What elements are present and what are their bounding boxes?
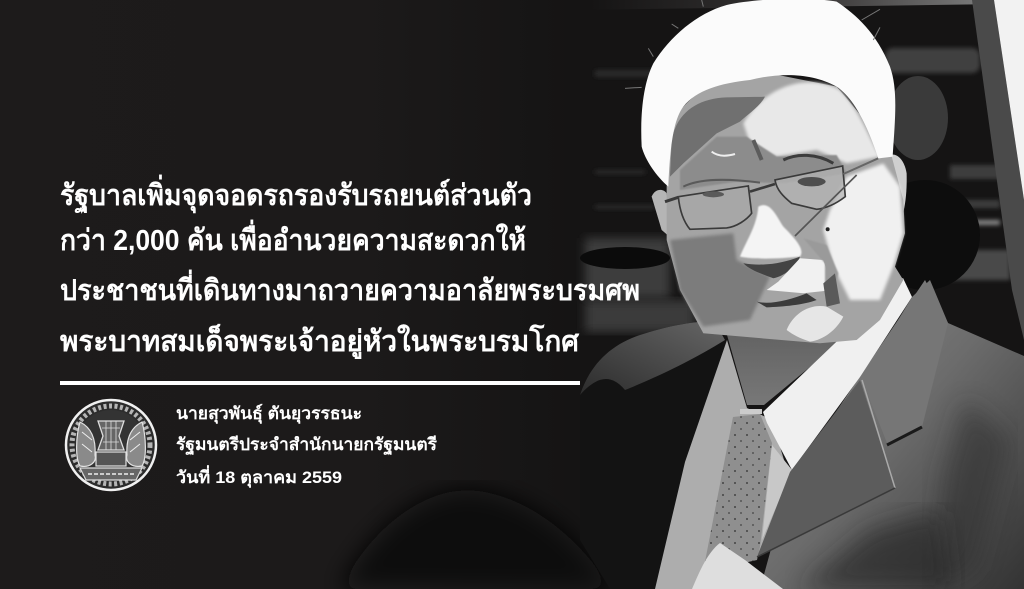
headline text: ประชาชนที่เดินทางมาถวายความอาลัยพระบรมศพ [60, 269, 640, 307]
signatory text: นายสุวพันธุ์ ตันยุวรรธนะ [176, 403, 362, 424]
lower face [757, 273, 843, 342]
moustache and upper lip [743, 257, 800, 278]
neck [727, 305, 885, 405]
nose highlight [740, 205, 801, 259]
dark shape in foreground [340, 490, 612, 589]
urn [98, 421, 124, 450]
signatory text: วันที่ 18 ตุลาคม 2559 [176, 465, 342, 488]
lions [77, 422, 95, 466]
photo: man portrait [580, 0, 1024, 589]
lapel upper [862, 280, 948, 443]
hair [641, 0, 895, 187]
white pocket cloth [692, 543, 783, 589]
lapel lower [757, 380, 895, 557]
right ear [880, 155, 907, 233]
signatory text [176, 403, 438, 488]
brow and eye socket [680, 137, 847, 190]
head group uses zoom coords [625, 0, 907, 343]
left cheek shade [670, 233, 770, 327]
headline text: รัฐบาลเพิ่มจุดจอดรถรองรับรถยนต์ส่วนตัว [60, 174, 532, 214]
right collar [763, 278, 912, 470]
divider bar [60, 381, 580, 385]
glasses [665, 158, 878, 236]
signatory text: รัฐมนตรีประจำสำนักนายกรัฐมนตรี [176, 434, 438, 456]
government seal [66, 400, 156, 490]
shirt [655, 340, 790, 589]
eyebrow [783, 155, 833, 163]
tie [703, 409, 772, 572]
headline text: กว่า 2,000 คัน เพื่ออำนวยความสะดวกให้ [60, 219, 526, 257]
forehead shading [670, 97, 765, 177]
right cheek highlight [823, 163, 903, 300]
suit right body [760, 280, 1024, 589]
photo: car pillar and window [972, 0, 1024, 340]
stubble band [803, 238, 838, 297]
left shoulder highlight [580, 322, 725, 395]
stray hairs [625, 0, 880, 88]
dark bushy hair of background figure [888, 76, 948, 160]
photo: car interior backdrop [580, 0, 1010, 332]
base [96, 452, 126, 466]
suit left side [580, 322, 745, 589]
headline text: พระบาทสมเด็จพระเจ้าอยู่หัวในพระบรมโกศ [60, 323, 580, 359]
forehead bright patch [743, 82, 880, 163]
left ear [652, 190, 673, 240]
headline text [60, 174, 640, 359]
face base [667, 73, 905, 343]
mole [826, 227, 830, 231]
